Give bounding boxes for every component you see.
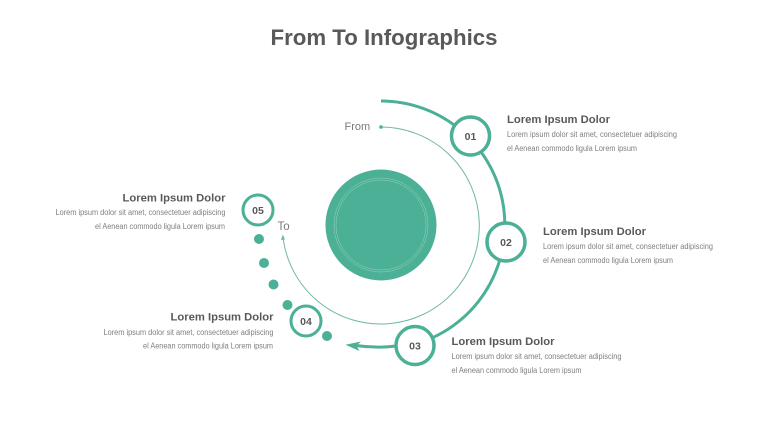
text block 03 (452, 336, 622, 375)
text block 02: Lorem Ipsum Dolor (543, 226, 647, 238)
title: From To Infographics (270, 25, 498, 50)
text block 04: Lorem ipsum dolor sit amet, consectetuer adipiscing (104, 328, 274, 337)
text block 05 (56, 192, 226, 231)
text block 01 (507, 114, 677, 153)
step 03 marker: 03 (409, 340, 421, 352)
step 03 marker (396, 326, 434, 364)
text block 05: Lorem Ipsum Dolor (122, 192, 226, 204)
text block 04 (104, 312, 274, 350)
step 05 marker (243, 195, 273, 225)
inner arc arrow (281, 125, 479, 324)
text block 04: el Aenean commodo ligula Lorem ipsum (143, 342, 273, 350)
text block 04: Lorem Ipsum Dolor (170, 312, 274, 324)
text block 05: Lorem ipsum dolor sit amet, consectetuer adipiscing (56, 208, 226, 217)
label: From: From (344, 121, 370, 133)
step 04 marker (291, 306, 321, 336)
step 05 marker: 05 (252, 205, 264, 217)
step 02 marker: 02 (500, 237, 512, 249)
text block 03: Lorem Ipsum Dolor (452, 336, 555, 348)
outer arc arrow (346, 101, 505, 351)
text block 01: Lorem Ipsum Dolor (507, 114, 611, 126)
text block 02: Lorem ipsum dolor sit amet, consectetuer adipiscing (543, 242, 713, 251)
text block 05: el Aenean commodo ligula Lorem ipsum (95, 222, 225, 231)
central circle (326, 170, 436, 280)
text block 01: el Aenean commodo ligula Lorem ipsum (507, 144, 637, 153)
connecting dots (254, 234, 332, 341)
text block 03: el Aenean commodo ligula Lorem ipsum (452, 366, 582, 375)
text block 01: Lorem ipsum dolor sit amet, consectetuer adipiscing (507, 130, 677, 139)
label: To: To (278, 221, 290, 233)
step 01 marker: 01 (465, 131, 476, 143)
text block 02: el Aenean commodo ligula Lorem ipsum (543, 256, 673, 265)
step 02 marker (487, 223, 525, 261)
step 01 marker (452, 117, 490, 155)
step 04 marker: 04 (300, 316, 312, 328)
text block 03: Lorem ipsum dolor sit amet, consectetuer adipiscing (452, 352, 622, 361)
text block 02 (543, 226, 713, 265)
